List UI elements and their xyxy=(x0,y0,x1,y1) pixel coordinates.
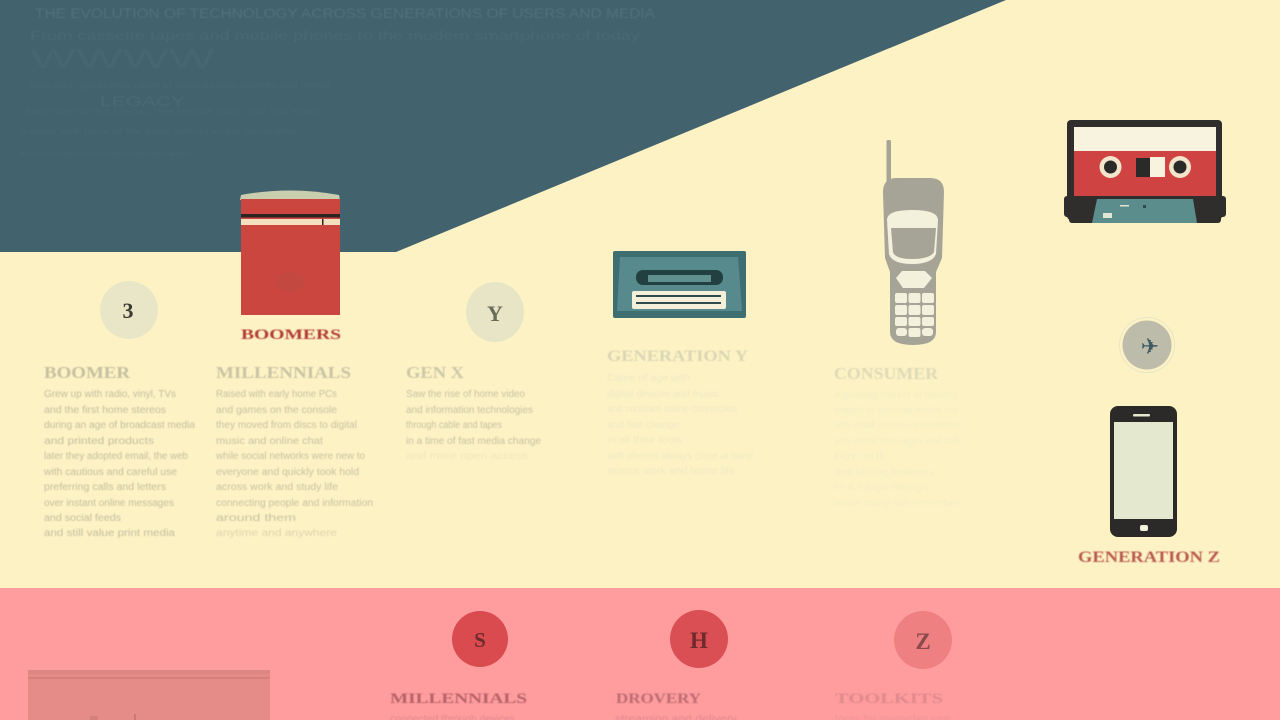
header text: WWWW xyxy=(30,43,216,74)
text block: column 4: and constant online connection xyxy=(607,404,737,415)
header text: technology through the decades xyxy=(20,151,196,158)
footer labels xyxy=(390,691,951,720)
text block: column 4: Came of age with xyxy=(607,373,690,384)
header text: From cassette tapes and mobile phones to the modern smartphone of today xyxy=(30,28,641,43)
text block: column 1: over instant online messages xyxy=(44,498,174,509)
text block: column 3: Saw the rise of home video xyxy=(406,389,525,400)
text block: column 2: anytime and anywhere xyxy=(216,528,338,539)
panel: navy header shape xyxy=(0,0,1006,252)
text block: column 2: MILLENNIALS xyxy=(216,363,351,382)
text block: column 1: and the first home stereos xyxy=(44,405,166,416)
text block: column 5: in a tough design xyxy=(834,482,929,493)
text block: column 4: digital devices and music xyxy=(607,389,719,400)
text block: column 4: across work and home life xyxy=(607,466,735,477)
text block: column 5: and lasting batteries xyxy=(834,467,934,478)
text block: column 2: while social networks were new to xyxy=(215,451,365,462)
badge: circle 3: 3 xyxy=(122,298,134,323)
icon: retro mobile phone xyxy=(883,140,944,345)
text block: column 2 xyxy=(215,363,373,539)
badge: footer circle S xyxy=(452,611,508,667)
badge: circle Y: Y xyxy=(487,301,503,326)
text block: column 5: which many still remember xyxy=(833,498,960,509)
text block: column 4: with phones always close at hand xyxy=(606,451,753,462)
text block: column 5: shaped by personal mobile use xyxy=(834,405,959,416)
text block: column 4: in all their tools xyxy=(607,435,682,446)
badge: footer circle S: S xyxy=(474,628,486,652)
text block: column 5: for all xyxy=(834,451,884,462)
footer labels: TOOLKITS xyxy=(835,691,943,707)
badge: plane circle xyxy=(1120,318,1174,372)
icon: teal console xyxy=(613,251,746,318)
text block: column 4: GENERATION Y xyxy=(607,348,749,365)
header text: a short look back at the tools behind every generation xyxy=(20,127,300,136)
label: red box caption: BOOMERS xyxy=(241,327,341,343)
text block: column 1: later they adopted email, the web xyxy=(44,451,188,462)
text block: column 3: through cable and tapes xyxy=(406,420,502,431)
icon: red storage box xyxy=(240,190,340,315)
text block: column 3: in a time of fast media change xyxy=(406,436,541,447)
text block: column 5: and simple messages and calls xyxy=(834,436,962,447)
badge: footer circle Z xyxy=(894,611,952,669)
header text xyxy=(20,5,656,158)
text block: column 5: A growing market of devices xyxy=(834,390,958,401)
text block: column 1: during an age of broadcast media xyxy=(44,420,195,431)
badge: footer circle H xyxy=(670,610,728,668)
text block: column 3 xyxy=(406,363,541,462)
badge: footer circle Z: Z xyxy=(915,629,931,654)
badge: circle Y xyxy=(466,282,524,342)
text block: column 3: GEN X xyxy=(406,363,465,382)
badge: plane circle: ✈ xyxy=(1141,335,1159,360)
header text: how each generation came to know its own devices and media xyxy=(30,80,330,90)
text block: column 5: with small screens everywhere xyxy=(833,420,962,431)
text block: column 5: CONSUMER xyxy=(834,364,939,383)
panel: pink footer band xyxy=(0,588,1280,720)
text block: column 1 xyxy=(43,363,195,539)
text block: column 2: connecting people and information xyxy=(216,498,373,509)
header text: LEGACY xyxy=(100,93,186,109)
text block: column 1: preferring calls and letters xyxy=(44,482,166,493)
text block: column 1: Grew up with radio, vinyl, TVs xyxy=(44,389,176,400)
text block: column 3: and information technologies xyxy=(406,405,533,416)
label: Generation Z: GENERATION Z xyxy=(1078,549,1220,566)
header text: each new device shaped how people listen, talk and share xyxy=(25,107,321,116)
text block: column 5 xyxy=(833,364,962,509)
text block: column 2: they moved from discs to digital xyxy=(216,420,357,431)
badge: footer circle H: H xyxy=(690,628,708,653)
text block: column 4: and fast change xyxy=(607,420,679,431)
text block: column 1: with cautious and careful use xyxy=(43,467,177,478)
footer labels: MILLENNIALS xyxy=(390,691,527,707)
text block: column 2: everyone and quickly took hold xyxy=(216,467,359,478)
icon: pink laptop xyxy=(28,670,270,720)
text block: column 2: across work and study life xyxy=(216,482,338,493)
text block: column 3: and more open access xyxy=(406,451,528,462)
text block: column 1: and still value print media xyxy=(44,528,176,539)
badge: circle 3 xyxy=(100,281,158,339)
text block: column 2: music and online chat xyxy=(216,436,323,447)
icon: smartphone xyxy=(1110,406,1177,537)
text block: column 1: and printed products xyxy=(44,436,154,447)
text block: column 2: Raised with early home PCs xyxy=(216,389,337,400)
icon: cassette tape xyxy=(1064,120,1226,223)
text block: column 2: and games on the console xyxy=(216,405,337,416)
text block: column 4 xyxy=(606,348,753,477)
header text: THE EVOLUTION OF TECHNOLOGY ACROSS GENERATIONS OF USERS AND MEDIA xyxy=(35,5,656,21)
text block: column 2: around them xyxy=(216,513,296,524)
text block: column 1: BOOMER xyxy=(44,363,131,382)
footer labels: DROVERY xyxy=(616,691,701,707)
text block: column 1: and social feeds xyxy=(44,513,121,524)
